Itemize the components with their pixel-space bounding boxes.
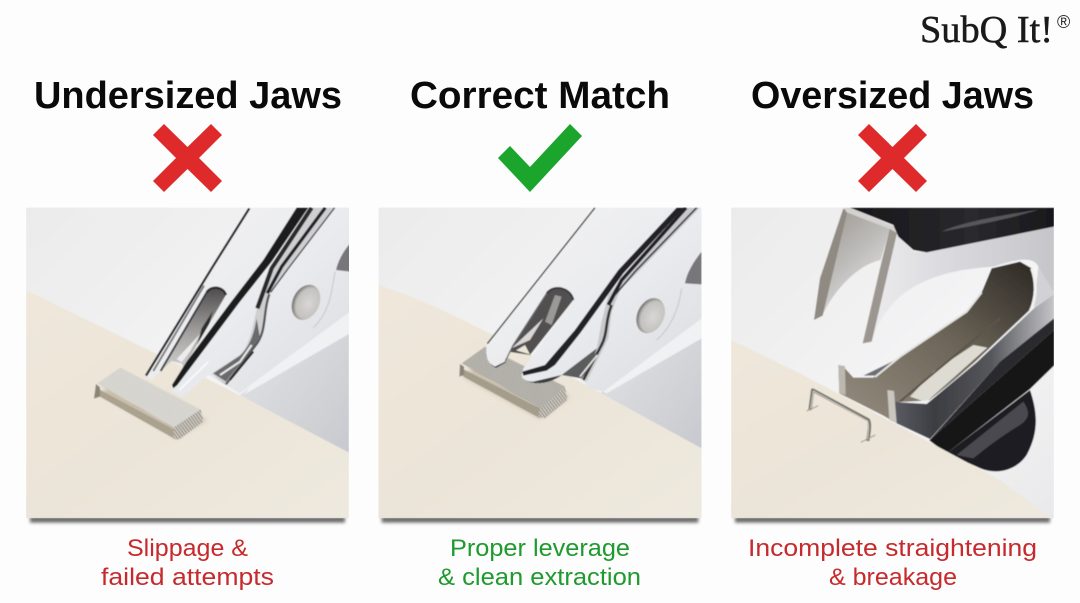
caption: Proper leverage and clean extraction [438,535,641,591]
caption: Proper leverage and clean extraction: Proper leverage [450,535,630,562]
caption: Proper leverage and clean extraction: & clean extraction [438,564,641,591]
caption: Incomplete straightening and breakage: & breakage [829,564,957,591]
icon: red cross [858,124,927,192]
heading: Oversized Jaws: Oversized Jaws [751,75,1034,117]
logo: SubQ It!: SubQ It! [920,9,1053,51]
panel: correct match photo [378,207,702,523]
caption: Incomplete straightening and breakage [748,535,1037,591]
column: correct match [378,75,702,591]
caption: Incomplete straightening and breakage: Incomplete straightening [748,535,1037,562]
panel: undersized jaws photo [26,207,350,523]
icon: red cross [153,124,222,192]
caption: Slippage and failed attempts: failed attempts [101,564,274,591]
caption: Slippage and failed attempts: Slippage & [127,535,248,562]
heading: Correct Match: Correct Match [410,75,670,117]
column: oversized jaws [731,75,1054,591]
icon: green check [498,124,582,192]
logo: SubQ It!: ® [1057,12,1070,32]
column: undersized jaws [26,75,350,591]
heading: Undersized Jaws: Undersized Jaws [34,75,342,117]
panel: oversized jaws photo [731,207,1054,523]
caption: Slippage and failed attempts [101,535,274,591]
